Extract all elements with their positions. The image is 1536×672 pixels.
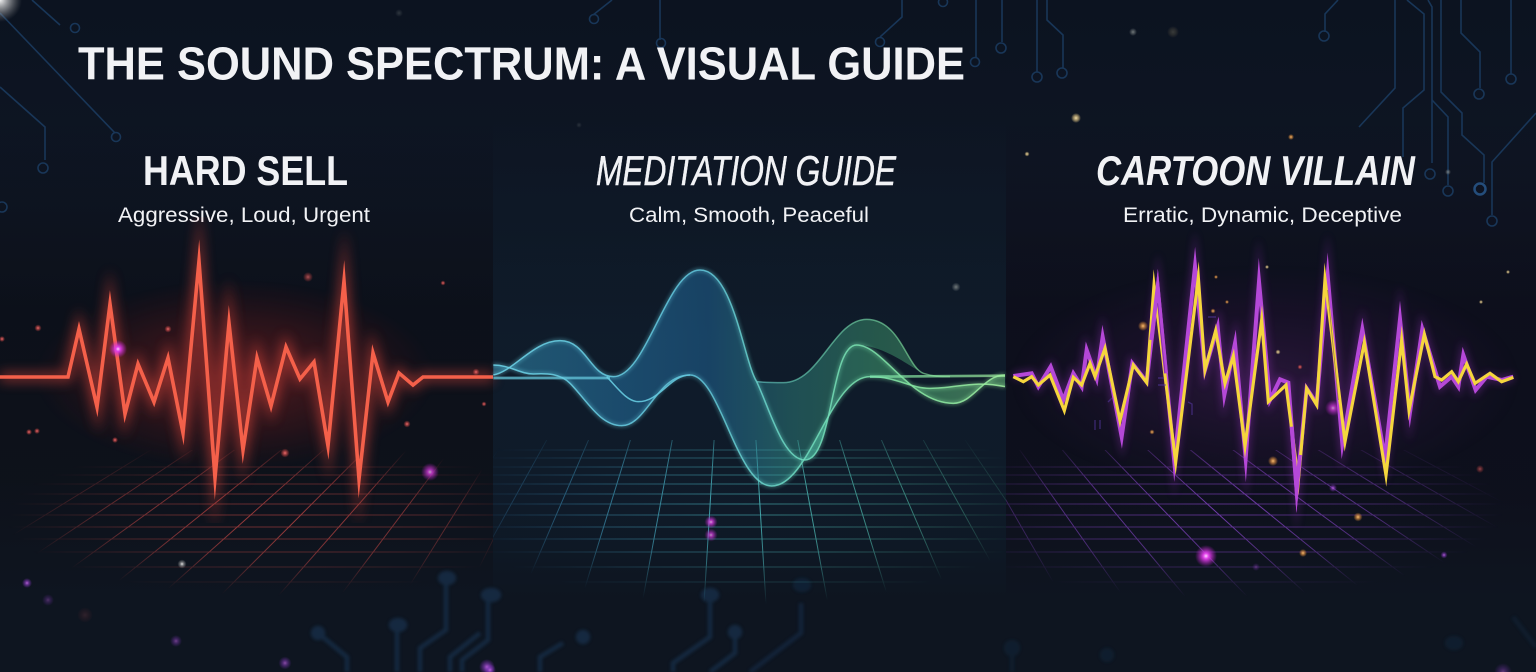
- heading: cartoon villain: CARTOON VILLAIN: [1096, 147, 1416, 194]
- descriptor: hard sell: Aggressive, Loud, Urgent: [118, 204, 370, 227]
- panel: meditation guide background: [493, 120, 1006, 600]
- waveform: villain purple and yellow: [1013, 267, 1513, 490]
- heading: meditation guide: MEDITATION GUIDE: [596, 147, 897, 194]
- heading: hard sell: HARD SELL: [143, 147, 348, 194]
- panel: meditation guide: [493, 147, 1005, 486]
- panel: cartoon villain background: [1006, 120, 1536, 600]
- glow: hard sell wave: [35, 280, 435, 470]
- grid: meditation floor: [493, 440, 1006, 601]
- grid: hard sell floor: [20, 450, 493, 592]
- circuit traces: top: [0, 0, 1536, 226]
- glow: villain wave: [1010, 265, 1520, 495]
- title: THE SOUND SPECTRUM: A VISUAL GUIDE: [78, 38, 965, 90]
- waveform: meditation ribbons: [493, 270, 1005, 486]
- circuit traces: bottom: [313, 573, 1536, 672]
- descriptor: meditation guide: Calm, Smooth, Peaceful: [629, 204, 869, 227]
- descriptor: cartoon villain: Erratic, Dynamic, Deceptive: [1123, 204, 1402, 227]
- panel: hard sell background: [0, 120, 493, 600]
- corner highlight: [0, 0, 22, 22]
- waveform: hard sell: [0, 261, 493, 479]
- debris: villain digital fragments: [1095, 317, 1216, 430]
- panel: hard sell: [0, 147, 493, 479]
- grid: villain floor: [1006, 450, 1488, 594]
- panel: cartoon villain: [1010, 147, 1520, 495]
